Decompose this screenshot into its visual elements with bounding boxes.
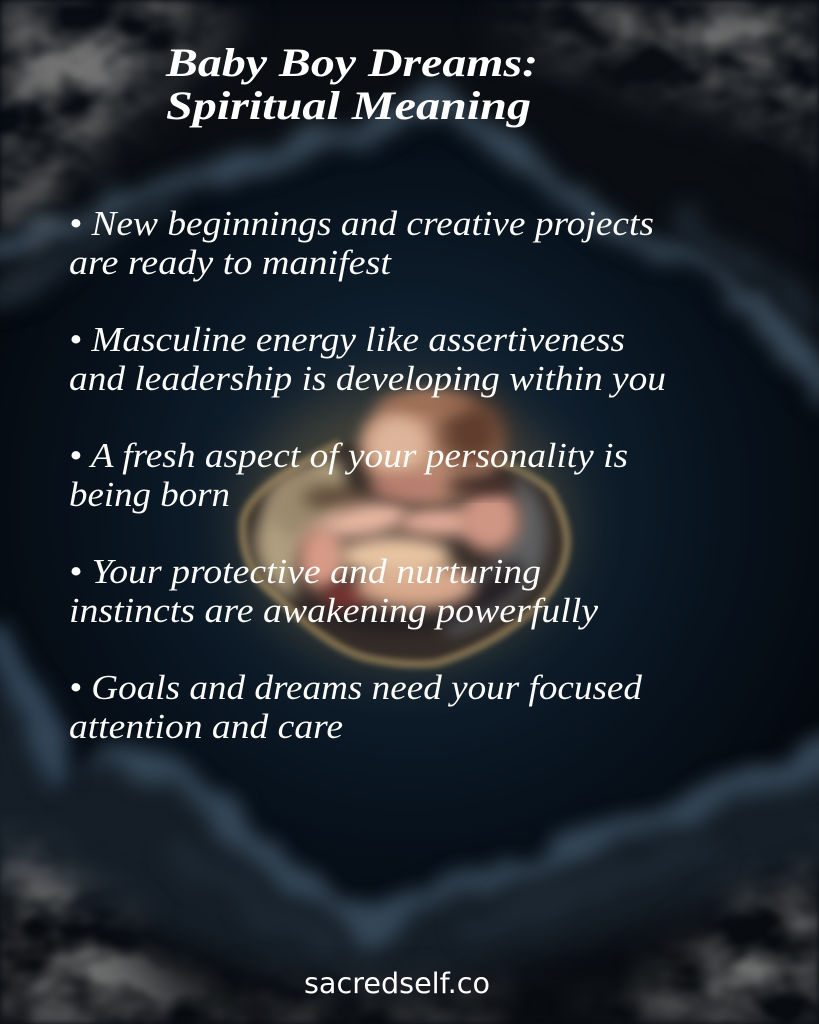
bullet 1: • New beginnings and creative projects bbox=[69, 204, 654, 243]
bullet 1: are ready to manifest bbox=[69, 243, 392, 282]
bullet 1 bbox=[69, 204, 654, 282]
baby in nest bbox=[240, 385, 570, 665]
footer url: sacredself.co bbox=[304, 967, 490, 1000]
clouds: lower arc bbox=[0, 630, 819, 1024]
dark lower shadow bbox=[300, 560, 524, 633]
bullet 2 bbox=[69, 320, 666, 398]
bullet 4 bbox=[69, 552, 599, 630]
bullet 4: instincts are awakening powerfully bbox=[69, 591, 599, 630]
nest interior bbox=[243, 443, 567, 664]
title bbox=[165, 40, 538, 128]
title: Baby Boy Dreams: bbox=[165, 40, 538, 85]
title: Spiritual Meaning bbox=[166, 83, 531, 128]
baby head bbox=[360, 392, 500, 502]
baby legs and belly bbox=[298, 526, 346, 590]
bullet 5: • Goals and dreams need your focused bbox=[69, 668, 643, 707]
baby arms bbox=[319, 496, 411, 544]
bullet 5 bbox=[69, 668, 643, 746]
cream wrap left bbox=[255, 455, 345, 600]
bullet 2: and leadership is developing within you bbox=[69, 359, 666, 398]
bullet 3: • A fresh aspect of your personality is bbox=[69, 436, 628, 475]
nest rim bbox=[243, 443, 567, 664]
bullet 2: • Masculine energy like assertiveness bbox=[69, 320, 625, 359]
clouds: upper arc bbox=[0, 0, 819, 395]
bullet 3: being born bbox=[69, 475, 230, 514]
bullet 3 bbox=[69, 436, 628, 514]
nest glow bbox=[240, 385, 570, 665]
bullet 4: • Your protective and nurturing bbox=[69, 552, 541, 591]
bullet 5: attention and care bbox=[69, 707, 343, 746]
grey cloth bbox=[430, 470, 547, 635]
